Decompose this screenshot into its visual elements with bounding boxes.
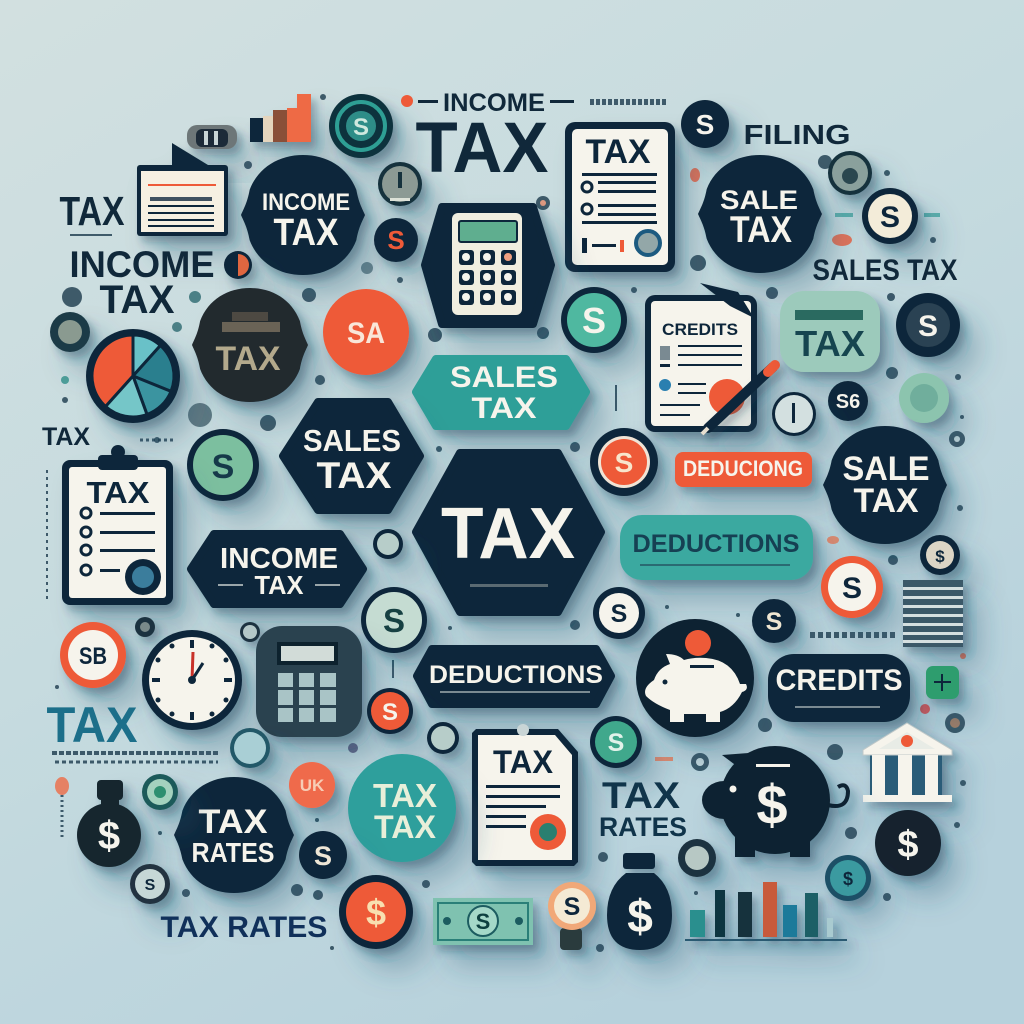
badge: sale tax right: SALE bbox=[842, 450, 930, 488]
label: tax rates bottom: TAX RATES bbox=[160, 911, 328, 944]
coin: orange uk: UK bbox=[300, 776, 325, 795]
coin: centre right bbox=[593, 587, 645, 639]
tag: sales tax teal bbox=[416, 359, 586, 426]
coin: teal bottom right bbox=[825, 855, 871, 901]
badge: sale tax right: TAX bbox=[854, 482, 919, 520]
badge: dark tax: TAX bbox=[216, 340, 281, 378]
coin: dark small: S bbox=[766, 608, 782, 636]
heading: tax: TAX bbox=[416, 109, 548, 188]
badge: sale tax right bbox=[823, 426, 947, 544]
tag: sales tax teal: SALES bbox=[450, 361, 558, 394]
coin: dark right: S bbox=[918, 310, 938, 343]
document: credits: CREDITS bbox=[662, 320, 738, 339]
tag: income tax dark bbox=[191, 534, 363, 604]
coin: dark lower: S bbox=[314, 841, 332, 871]
badge: sale tax bbox=[698, 155, 822, 273]
coin: small centre bbox=[427, 722, 459, 754]
badge: teal tax: TAX bbox=[795, 323, 865, 364]
coin: small centre left bbox=[373, 529, 403, 559]
hexagon: sales tax: SALES bbox=[303, 423, 401, 458]
badge: tax rates bbox=[174, 777, 294, 893]
coin: dark bottom right: $ bbox=[897, 824, 919, 866]
badge: tax tax teal bbox=[348, 754, 456, 862]
coin: s6: S6 bbox=[836, 391, 860, 413]
piggy bank: black bbox=[702, 746, 848, 857]
coin: orange left bbox=[60, 622, 126, 688]
coin: orange right bbox=[821, 556, 883, 618]
icon: striped stack bbox=[903, 580, 963, 647]
label: tax small: TAX bbox=[42, 423, 90, 451]
coin: teal bottom bbox=[590, 716, 642, 768]
tag: deductions orange bbox=[675, 452, 812, 487]
label: income tax left: TAX bbox=[100, 278, 175, 322]
coin: dark lower bbox=[299, 831, 347, 879]
badge: tax rates: TAX bbox=[198, 803, 268, 841]
pie chart bbox=[86, 329, 180, 423]
calculator hexagon bbox=[425, 207, 551, 324]
coin: small right bbox=[920, 535, 960, 575]
tag: credits dark bbox=[768, 654, 910, 722]
icon: bank bbox=[863, 723, 952, 802]
tag: deductions orange: DEDUCIONG bbox=[683, 456, 803, 481]
document: credits bbox=[645, 283, 757, 432]
badge: teal tax bbox=[780, 291, 880, 372]
coin: orange left: SB bbox=[79, 643, 107, 670]
label: tax left: TAX bbox=[60, 188, 124, 234]
coin: grey lower left bbox=[130, 864, 170, 904]
coin: teal outline left bbox=[230, 728, 270, 768]
badge: income tax: INCOME bbox=[262, 189, 350, 216]
label: tax rates: RATES bbox=[599, 812, 687, 842]
coin: orange bottom: $ bbox=[366, 892, 386, 933]
badge: tax tax teal: TAX bbox=[374, 809, 437, 845]
bar chart top bbox=[250, 94, 311, 142]
label: income tax left bbox=[70, 244, 214, 322]
tag: deductions dark: DEDUCTIONS bbox=[429, 661, 603, 689]
tag: credits dark: CREDITS bbox=[776, 664, 902, 697]
badge: orange sa: SA bbox=[347, 317, 385, 350]
coin: teal mid: S bbox=[582, 300, 606, 341]
badge: income tax bbox=[241, 155, 365, 275]
coin: dark top right: S bbox=[696, 109, 714, 140]
coin: orange right: S bbox=[842, 572, 862, 605]
tag: sales tax teal: TAX bbox=[472, 392, 536, 425]
coin: orange ring: S bbox=[615, 447, 633, 478]
label: tax teal: TAX bbox=[46, 697, 138, 753]
heading: income: INCOME bbox=[443, 89, 545, 117]
badge: dark tax bbox=[192, 288, 308, 402]
bar chart bottom bbox=[685, 882, 847, 941]
tag: income tax dark: INCOME bbox=[220, 543, 338, 575]
label: tax rates: TAX bbox=[602, 775, 680, 816]
icon: briefcase top left bbox=[187, 125, 237, 149]
icon: money bag bottom bbox=[607, 853, 672, 950]
coin: s6 bbox=[828, 381, 868, 421]
coin: white ring bbox=[862, 188, 918, 244]
label: income tax left: INCOME bbox=[70, 244, 214, 285]
coin: dark small bbox=[752, 599, 796, 643]
coin: green centre: S bbox=[383, 602, 405, 639]
coin: teal bottom: S bbox=[608, 729, 624, 757]
coin: small above clock left bbox=[135, 617, 155, 637]
hexagon: sales tax bbox=[283, 402, 420, 510]
coin: outline bbox=[772, 392, 816, 436]
icon: light bulb bbox=[548, 882, 596, 950]
document: tax form bottom bbox=[472, 724, 578, 866]
coin: small bottom bbox=[678, 839, 716, 877]
badge: deductions teal: DEDUCTIONS bbox=[632, 530, 800, 558]
document: tax form bottom: TAX bbox=[493, 744, 554, 780]
badge: deductions teal bbox=[620, 515, 813, 580]
hexagon: main tax bbox=[416, 453, 601, 612]
document: folder left bbox=[137, 143, 228, 236]
coin: dark bottom right bbox=[875, 810, 941, 876]
coin: orange small: S bbox=[382, 699, 398, 726]
label: sales tax right: SALES TAX bbox=[812, 254, 958, 287]
icon: money bag left bbox=[77, 780, 141, 867]
label: tax rates bbox=[599, 775, 687, 842]
coin: far left bbox=[50, 312, 90, 352]
coin: grey bbox=[828, 151, 872, 195]
clipboard: tax bbox=[62, 445, 173, 605]
coin: teal mid bbox=[561, 287, 627, 353]
icon: money bag bottom: $ bbox=[627, 890, 653, 942]
tag: income tax dark: TAX bbox=[254, 570, 304, 600]
icon: light bulb: S bbox=[564, 893, 580, 921]
coin: grey lower left: S bbox=[145, 877, 156, 894]
tag: deductions dark bbox=[417, 649, 611, 704]
icon: pen bbox=[702, 365, 775, 434]
coin: small right: $ bbox=[935, 547, 945, 566]
coin: orange ring bbox=[590, 428, 658, 496]
coin: green left bbox=[187, 429, 259, 501]
coin: small above calculator bbox=[240, 622, 260, 642]
calculator dark bbox=[256, 626, 362, 737]
icon: banknote: S bbox=[476, 909, 490, 934]
coin: teal small left bbox=[142, 774, 178, 810]
coin: dark top right bbox=[681, 100, 729, 148]
badge: orange sa bbox=[323, 289, 409, 375]
heading: income bbox=[401, 89, 574, 117]
piggy bank: black: $ bbox=[756, 773, 788, 836]
coin: grey small bbox=[378, 162, 422, 206]
coin: small left bbox=[224, 251, 252, 279]
badge: sale tax: SALE bbox=[720, 185, 798, 215]
icon: green square bbox=[926, 666, 959, 699]
coin: centre right: S bbox=[611, 600, 627, 628]
coin: teal top bbox=[329, 94, 393, 158]
coin: orange small bbox=[367, 688, 413, 734]
document: tax form top: TAX bbox=[586, 133, 651, 171]
badge: tax tax teal: TAX bbox=[373, 777, 437, 814]
coin: pale teal bbox=[899, 373, 949, 423]
icon: banknote bbox=[433, 898, 533, 945]
coin: orange bottom bbox=[339, 875, 413, 949]
coin: orange uk bbox=[289, 762, 335, 808]
badge: piggy bank bbox=[636, 619, 754, 737]
coin: red s bbox=[374, 218, 418, 262]
hexagon: sales tax: TAX bbox=[316, 455, 392, 496]
coin: dark right bbox=[896, 293, 960, 357]
coin: teal bottom right: $ bbox=[843, 869, 853, 889]
label: filing: FILING bbox=[744, 119, 850, 150]
icon: money bag left: $ bbox=[98, 814, 120, 858]
coin: white ring: S bbox=[880, 201, 900, 234]
badge: tax rates: RATES bbox=[192, 837, 274, 868]
coin: green left: S bbox=[212, 448, 234, 486]
coin: red s: S bbox=[387, 225, 405, 255]
document: tax form top bbox=[565, 122, 675, 272]
badge: sale tax: TAX bbox=[730, 209, 792, 250]
coin: green centre bbox=[361, 587, 427, 653]
clipboard: tax: TAX bbox=[86, 475, 150, 510]
hexagon: main tax: TAX bbox=[441, 494, 575, 574]
clock bbox=[142, 630, 242, 730]
badge: income tax: TAX bbox=[274, 212, 339, 254]
coin: teal top: S bbox=[353, 114, 369, 141]
